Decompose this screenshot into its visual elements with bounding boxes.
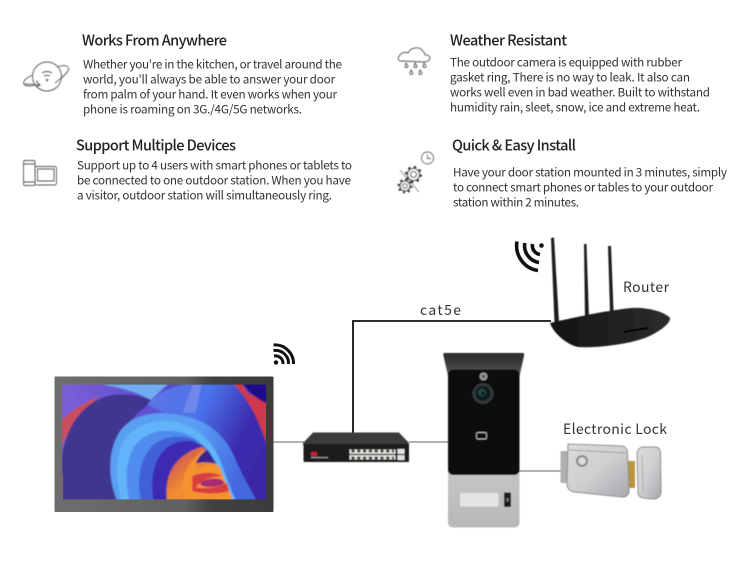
door station [443, 353, 524, 528]
call button [504, 492, 511, 507]
text block: weather resistant: gasket ring, There is no way to leak. It also can [450, 68, 690, 86]
router body [550, 308, 670, 347]
switch top [303, 432, 409, 445]
text block: support multiple devices: a visitor, outdoor station will simultaneously ring. [77, 186, 332, 204]
switch logo [311, 452, 328, 458]
door station silver plate [448, 420, 520, 528]
router antennas [551, 238, 614, 322]
text block: works from anywhere: Whether you're in the kitchen, or travel around the [83, 56, 342, 72]
connection lines [266, 321, 562, 471]
router [550, 238, 670, 347]
text block: quick and easy install: Have your door station mounted in 3 minutes, simply [453, 164, 727, 180]
feature: weather resistant [398, 30, 710, 116]
feature: quick and easy install [398, 134, 727, 210]
text block: weather resistant: works well even in bad weather. Built to withstand [450, 84, 710, 100]
lock key cylinder [576, 455, 588, 467]
poe network switch [303, 432, 409, 462]
electronic lock [560, 444, 661, 499]
icon: wifi signal near monitor [274, 345, 294, 365]
icon: wifi signal near router [517, 242, 544, 270]
monitor screen wallpaper [59, 381, 269, 503]
text block: works from anywhere: from palm of your hand. It even works when your [83, 86, 337, 102]
door station rain hood [443, 353, 524, 376]
indicator light [480, 372, 488, 380]
icon: phone and tablet [24, 160, 56, 186]
text block: works from anywhere [83, 56, 342, 118]
label: cat5e: cat5e [420, 300, 461, 320]
text block: support multiple devices: Support up to 4 users with smart phones or tablets to [77, 156, 352, 174]
text block: works from anywhere: phone is roaming on 3G./4G/5G networks. [83, 100, 302, 118]
text block: support multiple devices: be connected to one outdoor station. When you have [77, 172, 351, 188]
monitor bezel [54, 376, 274, 512]
heading: weather resistant: Weather Resistant [450, 30, 567, 50]
monitor [54, 376, 274, 512]
lock strike plate [637, 447, 661, 499]
icon: rain cloud [398, 48, 430, 74]
name plate [460, 493, 498, 506]
lock left flange [560, 451, 568, 483]
heading: works from anywhere: Works From Anywhere [82, 30, 227, 50]
door station black panel [448, 370, 520, 475]
switch ports [350, 449, 404, 460]
camera lens [472, 383, 494, 404]
text block: works from anywhere: world, you'll always be able to answer your door [83, 70, 335, 88]
text block: weather resistant: The outdoor camera is equipped with rubber [450, 54, 682, 70]
label: electronic lock: Electronic Lock [563, 419, 667, 439]
text block: quick and easy install [453, 164, 727, 210]
lock bolt [627, 461, 635, 488]
icon: rfid card [476, 432, 486, 439]
label: router: Router [623, 277, 670, 297]
lock case [567, 444, 629, 497]
text block: quick and easy install: station within 2 minutes. [453, 194, 579, 210]
heading: support multiple devices: Support Multiple Devices [76, 134, 236, 156]
text block: weather resistant: humidity rain, sleet, snow, ice and extreme heat. [450, 98, 700, 116]
icon: globe with wifi and orbit [24, 62, 69, 91]
text block: weather resistant [450, 54, 710, 116]
text block: support multiple devices [77, 156, 352, 204]
feature: works from anywhere [24, 30, 342, 118]
icon: gears and clock [398, 152, 434, 192]
switch front [304, 444, 409, 462]
feature: support multiple devices [24, 134, 352, 204]
heading: quick and easy install: Quick & Easy Install [452, 134, 576, 156]
text block: quick and easy install: to connect smart phones or tables to your outdoor [453, 178, 713, 196]
